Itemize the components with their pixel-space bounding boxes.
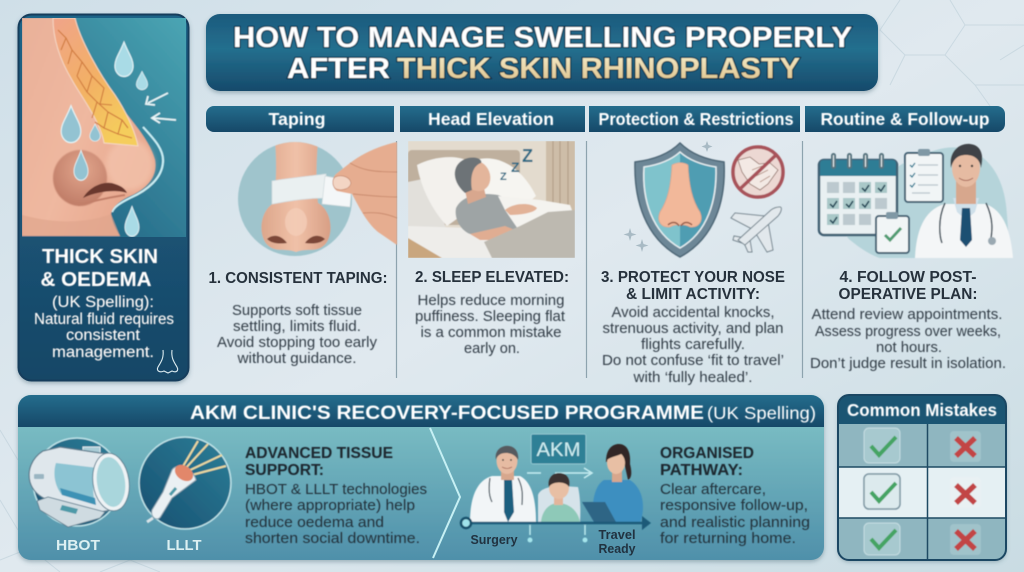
panel: AKM clinic programme [18,395,824,560]
text: organised pathway: and realistic planning [660,515,810,531]
text: taping advice: without guidance. [236,351,356,367]
text: protection advice: Do not confuse ‘fit to travel’ [602,353,784,369]
timeline label: Travel Ready: Ready [598,542,636,556]
column header: Routine and Follow-up: Routine & Follow-up [820,109,990,129]
column header: Head Elevation [400,106,585,132]
illustration: nose being taped [238,141,397,256]
panel: taping [208,141,397,367]
text: advanced tissue support: HBOT & LLLT technologies [245,482,427,498]
badge: AKM: AKM [536,440,580,461]
illustration: shield with nose [635,143,724,257]
heading: protect your nose: 3. PROTECT YOUR NOSE [601,269,785,286]
panel: thick skin and oedema [18,14,188,380]
text: follow-up advice: Attend review appointments. [812,307,1002,323]
check and cross row 1 [864,428,981,463]
column header: Head Elevation: Head Elevation [428,109,554,129]
decorative sparkles [624,141,712,252]
title banner: AFTER [287,53,390,85]
panel: common mistakes [838,395,1006,560]
text: sleep advice [415,293,565,357]
timeline label: Surgery: Surgery [470,533,518,547]
text: organised pathway: PATHWAY: [660,462,743,479]
heading: sleep elevated: 2. SLEEP ELEVATED: [415,269,569,286]
heading: thick skin and oedema: & OEDEMA [40,269,152,291]
title banner [206,14,878,91]
timeline label: Travel Ready: Travel [598,528,636,542]
icon: HBOT chamber [29,438,133,527]
icon: small nose outline [157,350,178,373]
text: sleep advice: is a common mistake [420,325,562,341]
text: sleep advice: puffiness. Sleeping flat [415,309,565,325]
text: taping advice: Supports soft tissue [232,303,362,319]
icon: water drops [61,42,148,236]
illustration: man sleeping with head raised: Z [511,159,520,175]
text: organised pathway [660,445,810,547]
illustration: calendar, clipboards and doctor [819,144,1013,258]
text: taping advice: Avoid stopping too early [217,335,378,351]
text: advanced tissue support: (where appropriate) help [245,498,415,514]
title banner: THICK SKIN RHINOPLASTY [397,53,800,85]
title banner: HOW TO MANAGE SWELLING PROPERLY [233,22,852,54]
text: advanced tissue support: reduce oedema and [245,515,384,531]
panel: routine and follow-up [810,144,1013,372]
column header: Taping [206,106,394,132]
text: taping advice: settling, limits fluid. [233,319,361,335]
row highlight [839,467,1005,518]
label: LLLT: LLLT [166,537,202,554]
heading: consistent taping: 1. CONSISTENT TAPING: [208,270,388,287]
illustration: man sleeping with head raised [408,141,575,258]
chevron divider [430,428,460,558]
text: protection advice: Avoid accidental knocks, [612,305,774,321]
heading: thick skin and oedema: Natural fluid requires [34,311,174,328]
label: HBOT: HBOT [56,537,100,554]
text: follow-up advice [810,307,1006,372]
heading: thick skin and oedema: management. [52,344,154,361]
panel: protection and restrictions [601,141,785,386]
column header: Protection and Restrictions: Protection & Restrictions [598,109,794,129]
text: follow-up advice: Don’t judge result in isolation. [810,356,1006,372]
heading: protect your nose [601,269,785,303]
common mistakes header: Common Mistakes [847,400,997,420]
text: protection advice: strenuous activity, and plan [602,321,784,337]
text: follow-up advice: not hours. [876,340,942,356]
illustration: man sleeping with head raised: Z [500,171,507,183]
icon: LLLT device [139,437,231,529]
timeline label: Travel Ready [598,528,636,556]
text: advanced tissue support: ADVANCED TISSUE [245,445,393,462]
text: protection advice: with ‘fully healed’. [632,370,752,386]
common mistakes header [838,395,1006,424]
text: organised pathway: Clear aftercare, [660,482,766,498]
text: advanced tissue support: SUPPORT: [245,462,324,479]
programme header: (UK Spelling) [707,403,816,423]
programme header: AKM CLINIC'S RECOVERY-FOCUSED PROGRAMME [190,403,704,424]
heading: thick skin and oedema: (UK Spelling): [52,294,154,311]
heading: thick skin and oedema [34,246,174,361]
column header: Taping: Taping [268,109,326,129]
heading: thick skin and oedema: THICK SKIN [42,246,158,268]
heading: follow post-operative plan: OPERATIVE PLAN: [838,286,978,303]
icon: no contact sign [733,147,783,197]
badge: AKM [531,434,586,464]
check and cross row 3 [864,523,981,555]
text: advanced tissue support [245,445,427,547]
text: organised pathway: responsive follow-up, [660,498,808,514]
text: organised pathway: ORGANISED [660,445,754,462]
text: follow-up advice: Assess progress over weeks, [815,324,1001,340]
icon: airplane [731,207,781,252]
heading: follow post-operative plan [838,269,978,303]
check and cross row 2 [864,474,981,509]
text: sleep advice: early on. [464,341,520,357]
panel: head elevation [408,141,575,357]
column header: Routine and Follow-up [805,106,1005,132]
text: taping advice [217,303,378,367]
text: sleep advice: Helps reduce morning [418,293,564,309]
heading: protect your nose: & LIMIT ACTIVITY: [626,286,760,303]
text: protection advice [602,305,784,386]
text: organised pathway: for returning home. [660,531,796,547]
heading: follow post-operative plan: 4. FOLLOW POST- [840,269,976,286]
icon: compression arrows [146,93,176,123]
illustration: care team and timeline [461,434,651,542]
text: protection advice: flights carefully. [641,337,745,353]
illustration: man sleeping with head raised: Z [522,146,533,166]
text: advanced tissue support: shorten social downtime. [245,531,420,547]
programme header [18,395,824,427]
heading: thick skin and oedema: consistent [66,327,141,344]
illustration: swollen nose cross-section [20,16,187,238]
